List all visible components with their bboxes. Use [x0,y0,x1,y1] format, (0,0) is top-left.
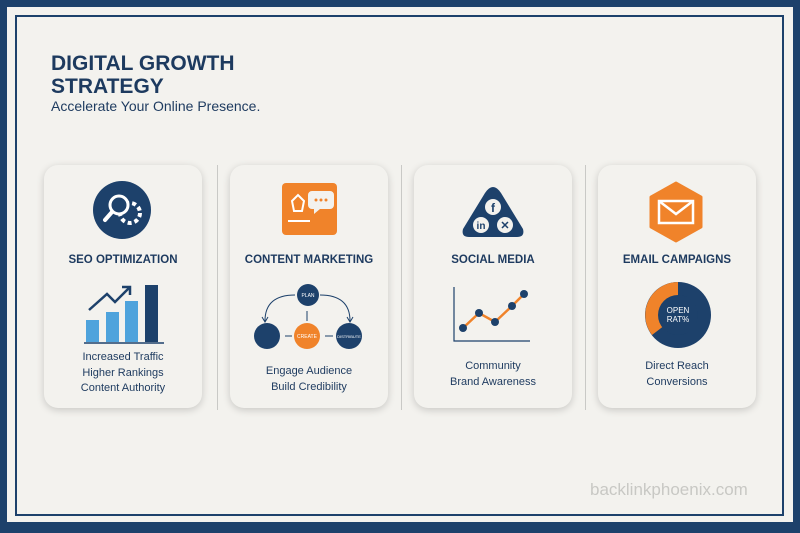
title: DIGITAL GROWTH [51,52,235,75]
title: STRATEGY [51,75,164,98]
panel: SEO [44,165,202,408]
icon: search gear [93,181,151,239]
icon: pen speech [282,183,337,235]
cycle diagram [254,284,362,349]
bar chart [84,285,164,344]
subtitle: Accelerate Your Online Presence. [51,98,260,114]
panel: social media: Brand Awareness [450,376,536,388]
icon: social triangle [462,187,524,237]
panel: social media: Community [465,360,521,372]
panel: SEO: Higher Rankings [82,366,164,378]
line chart [453,287,530,342]
donut chart: RAT% [667,315,689,324]
panel: email: Direct Reach [645,360,709,372]
panel: SEO: Increased Traffic [82,351,164,363]
panel: email: EMAIL CAMPAIGNS [623,254,731,266]
cycle diagram: PLAN [301,293,315,299]
cycle diagram: DISTRIBUTE [337,334,361,339]
panel: social media: SOCIAL MEDIA [451,254,535,266]
donut chart: OPEN [667,306,690,315]
donut chart [645,282,711,348]
title [51,52,235,98]
icon: social triangle: ✕ [500,220,510,232]
panel: content marketing: Build Credibility [271,380,347,392]
panel: content marketing: Engage Audience [266,365,352,377]
panel: email [598,165,756,408]
cycle diagram: CREATE [297,334,318,340]
watermark: backlinkphoenix.com [590,480,748,499]
icon: social triangle: f [491,201,496,215]
panel: content marketing [230,165,388,408]
panel: SEO: Content Authority [81,382,165,394]
icon: email hexagon [650,182,702,242]
panel: content marketing: CONTENT MARKETING [245,254,373,266]
icon: social triangle: in [477,221,485,232]
panel: social media [414,165,572,408]
panel: SEO: SEO OPTIMIZATION [68,254,178,266]
panel: email: Conversions [646,376,708,388]
